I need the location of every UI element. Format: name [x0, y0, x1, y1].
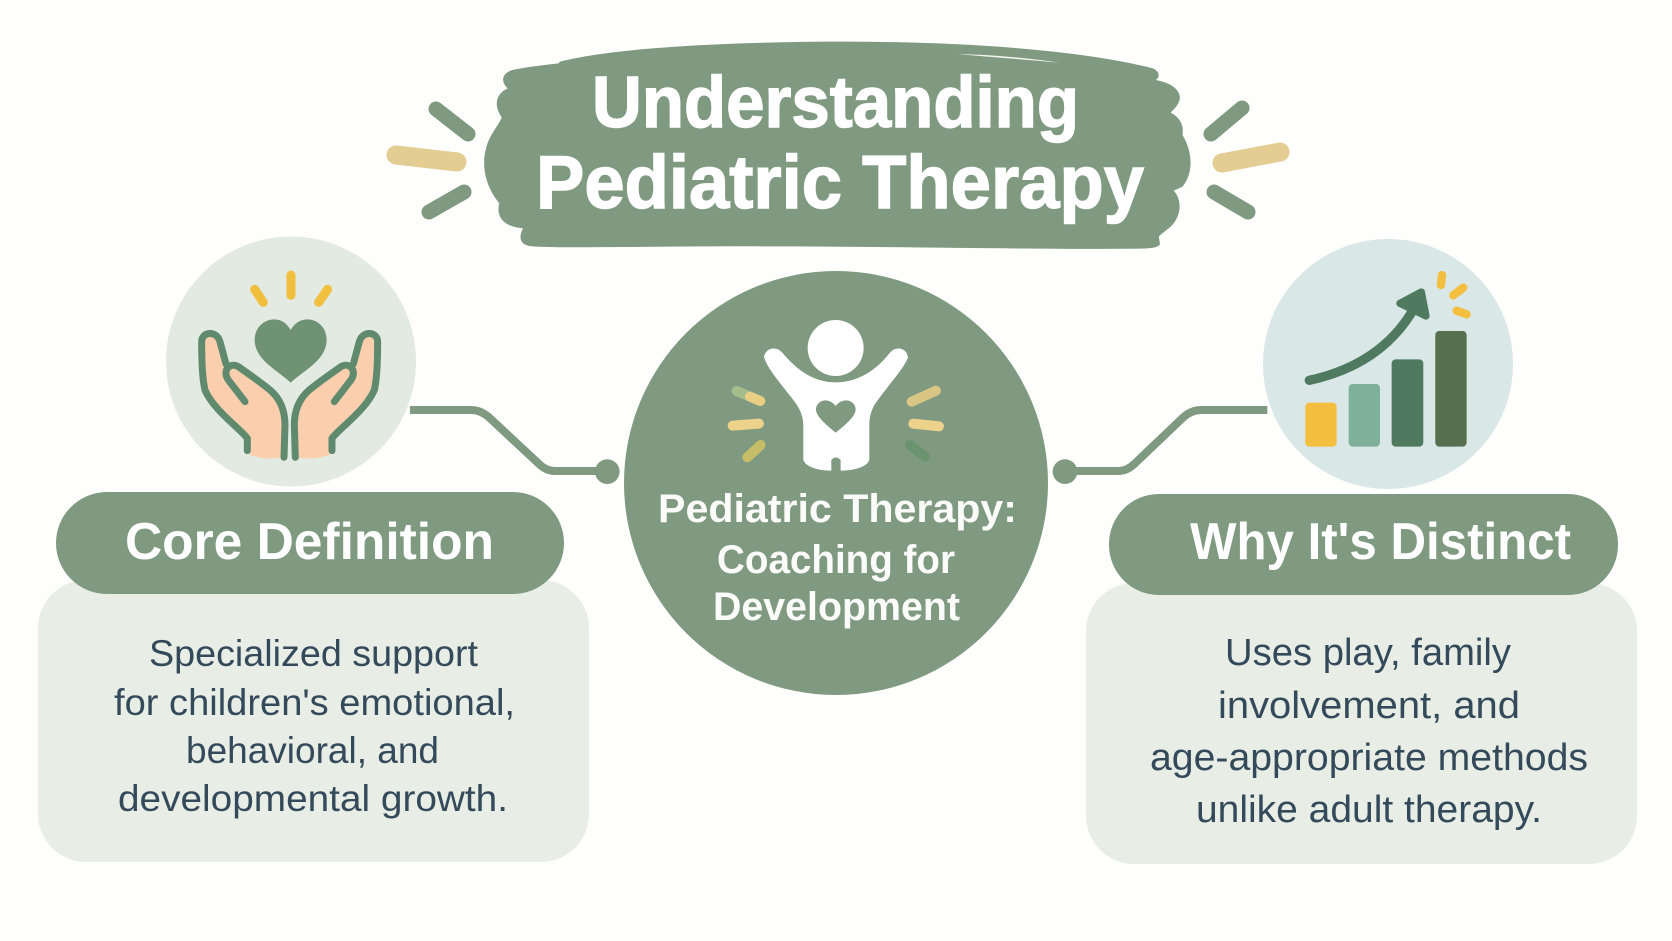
- icon: caring hands with heart: [166, 236, 416, 486]
- body text: involvement, and: [1218, 685, 1520, 727]
- body text: Specialized support: [149, 633, 479, 674]
- heading pill: [1109, 494, 1618, 595]
- heading pill: [56, 492, 564, 594]
- icon: child with raised arms: [733, 320, 939, 471]
- heading: Core Definition: [125, 513, 494, 571]
- body text: behavioral, and: [186, 730, 439, 771]
- sparkle rays: [1441, 275, 1467, 314]
- growth arrow: [1309, 292, 1426, 380]
- body text: developmental growth.: [118, 778, 508, 819]
- connector: left icon to centre: [410, 410, 620, 484]
- central label: [658, 487, 1017, 629]
- brush-stroke banner shape: [484, 42, 1191, 249]
- body text: unlike adult therapy.: [1196, 789, 1542, 831]
- circle background: [624, 271, 1048, 695]
- left title rays: [396, 109, 468, 212]
- body text: for children's emotional,: [114, 682, 515, 723]
- body card: [1086, 583, 1637, 864]
- panel: core definition: [38, 492, 589, 862]
- title text: [536, 63, 1144, 224]
- central circle: pediatric therapy: [624, 271, 1048, 695]
- rays: [733, 391, 939, 457]
- right hand: [294, 334, 378, 459]
- body card: [38, 580, 589, 862]
- body text: [1150, 632, 1588, 831]
- title banner: [484, 42, 1191, 249]
- connector: centre to right icon: [1053, 410, 1267, 484]
- central label: Development: [713, 585, 960, 629]
- bars: [1305, 331, 1467, 447]
- central label: Pediatric Therapy:: [658, 487, 1017, 531]
- sparkle rays: [255, 275, 328, 302]
- icon background circle: [1263, 239, 1513, 489]
- heading: Why It's Distinct: [1190, 513, 1571, 571]
- panel: why it's distinct: [1086, 494, 1637, 864]
- right title rays: [1211, 108, 1280, 212]
- title text: Understanding: [592, 63, 1079, 143]
- heart: [255, 319, 327, 383]
- body text: [114, 633, 515, 819]
- body text: Uses play, family: [1225, 632, 1511, 674]
- left hand: [202, 334, 285, 459]
- body text: age-appropriate methods: [1150, 737, 1588, 779]
- title text: Pediatric Therapy: [536, 140, 1144, 224]
- icon: growth bar chart with arrow: [1263, 239, 1513, 489]
- icon background circle: [166, 236, 416, 486]
- central label: Coaching for: [717, 538, 955, 582]
